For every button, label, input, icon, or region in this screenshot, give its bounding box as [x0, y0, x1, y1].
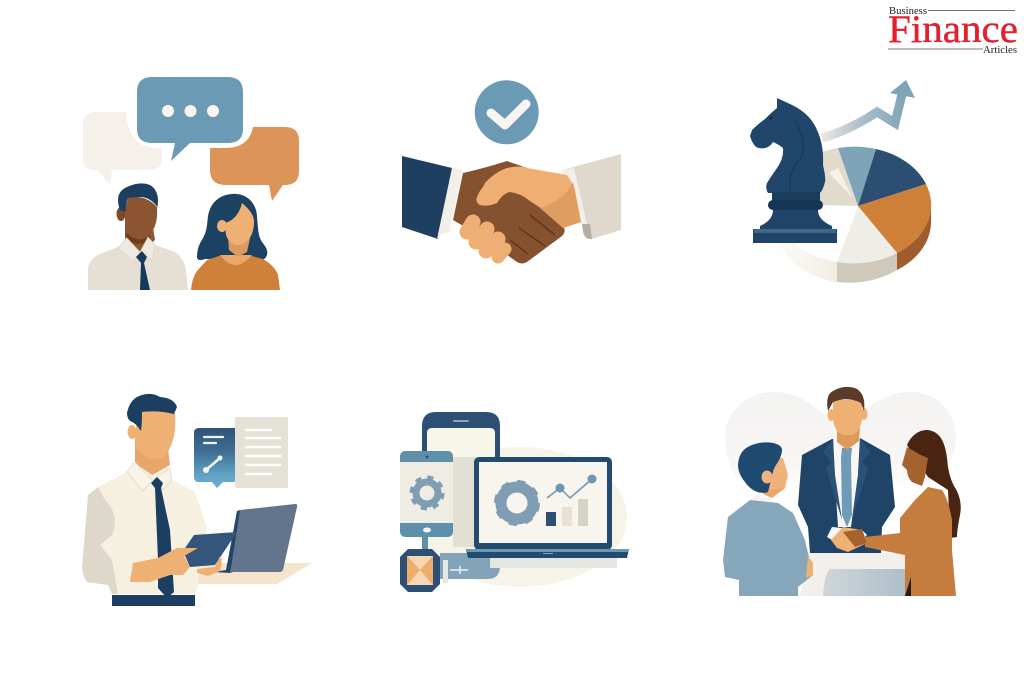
watch	[400, 549, 440, 592]
navy sleeve	[402, 156, 452, 239]
bar chart	[546, 499, 588, 526]
chess knight	[750, 98, 837, 243]
icon: check badge	[475, 80, 539, 144]
left device	[400, 451, 453, 537]
panel: handshake with check badge	[402, 80, 621, 264]
speech bubble: cream	[83, 112, 162, 185]
background shape	[725, 392, 956, 490]
face	[135, 411, 175, 459]
back phone	[422, 412, 500, 480]
man figure	[88, 183, 188, 290]
tablet	[183, 532, 237, 567]
panel: conversation with speech bubbles	[83, 77, 299, 290]
logo: Business Finance Articles: Finance	[888, 8, 1018, 51]
woman on right	[865, 430, 961, 596]
clasped hands	[827, 527, 867, 552]
document: blue callout	[194, 428, 235, 488]
hair	[127, 394, 177, 431]
growth arrow	[822, 80, 915, 138]
center man	[798, 387, 895, 553]
desk	[198, 552, 312, 584]
panel: businessman with tablet and laptop	[82, 394, 312, 606]
shirt	[82, 462, 207, 594]
pie chart rim	[778, 205, 931, 283]
woman figure	[191, 194, 280, 290]
speech bubble: blue with dots	[137, 77, 243, 161]
brown hand	[453, 161, 565, 264]
collar	[127, 462, 172, 491]
left hand	[197, 556, 222, 576]
fingers	[467, 222, 505, 257]
pie chart slices	[820, 147, 931, 263]
cream sleeve right	[562, 154, 621, 239]
panel: chess knight and pie chart	[750, 80, 931, 283]
white cuff left	[437, 168, 463, 239]
laptop	[214, 504, 297, 573]
logo: Business Finance Articles: Articles	[983, 45, 1017, 56]
document: beige	[235, 417, 288, 488]
left person from behind	[723, 442, 813, 596]
ear	[128, 425, 136, 439]
neck	[135, 442, 170, 475]
line chart	[547, 474, 596, 498]
laptop base	[466, 549, 629, 558]
light hand	[476, 166, 581, 228]
icon: large gear	[496, 482, 538, 524]
laptop shadow	[490, 558, 617, 568]
shirt shading	[82, 487, 118, 594]
podium	[800, 553, 905, 596]
panel: three people meeting	[723, 387, 961, 596]
logo: Business Finance Articles: Business	[889, 6, 927, 17]
speech bubble: orange	[210, 127, 299, 201]
belt	[112, 595, 195, 606]
panel: devices with gears and charts	[400, 412, 629, 592]
tie	[151, 477, 174, 598]
icon: small gear	[412, 478, 442, 508]
strap	[440, 553, 500, 579]
hand and forearm	[130, 548, 198, 582]
connector	[422, 537, 428, 549]
strap details	[443, 560, 468, 583]
device shadow	[453, 457, 475, 547]
background blob	[413, 447, 627, 587]
laptop screen	[474, 457, 612, 550]
